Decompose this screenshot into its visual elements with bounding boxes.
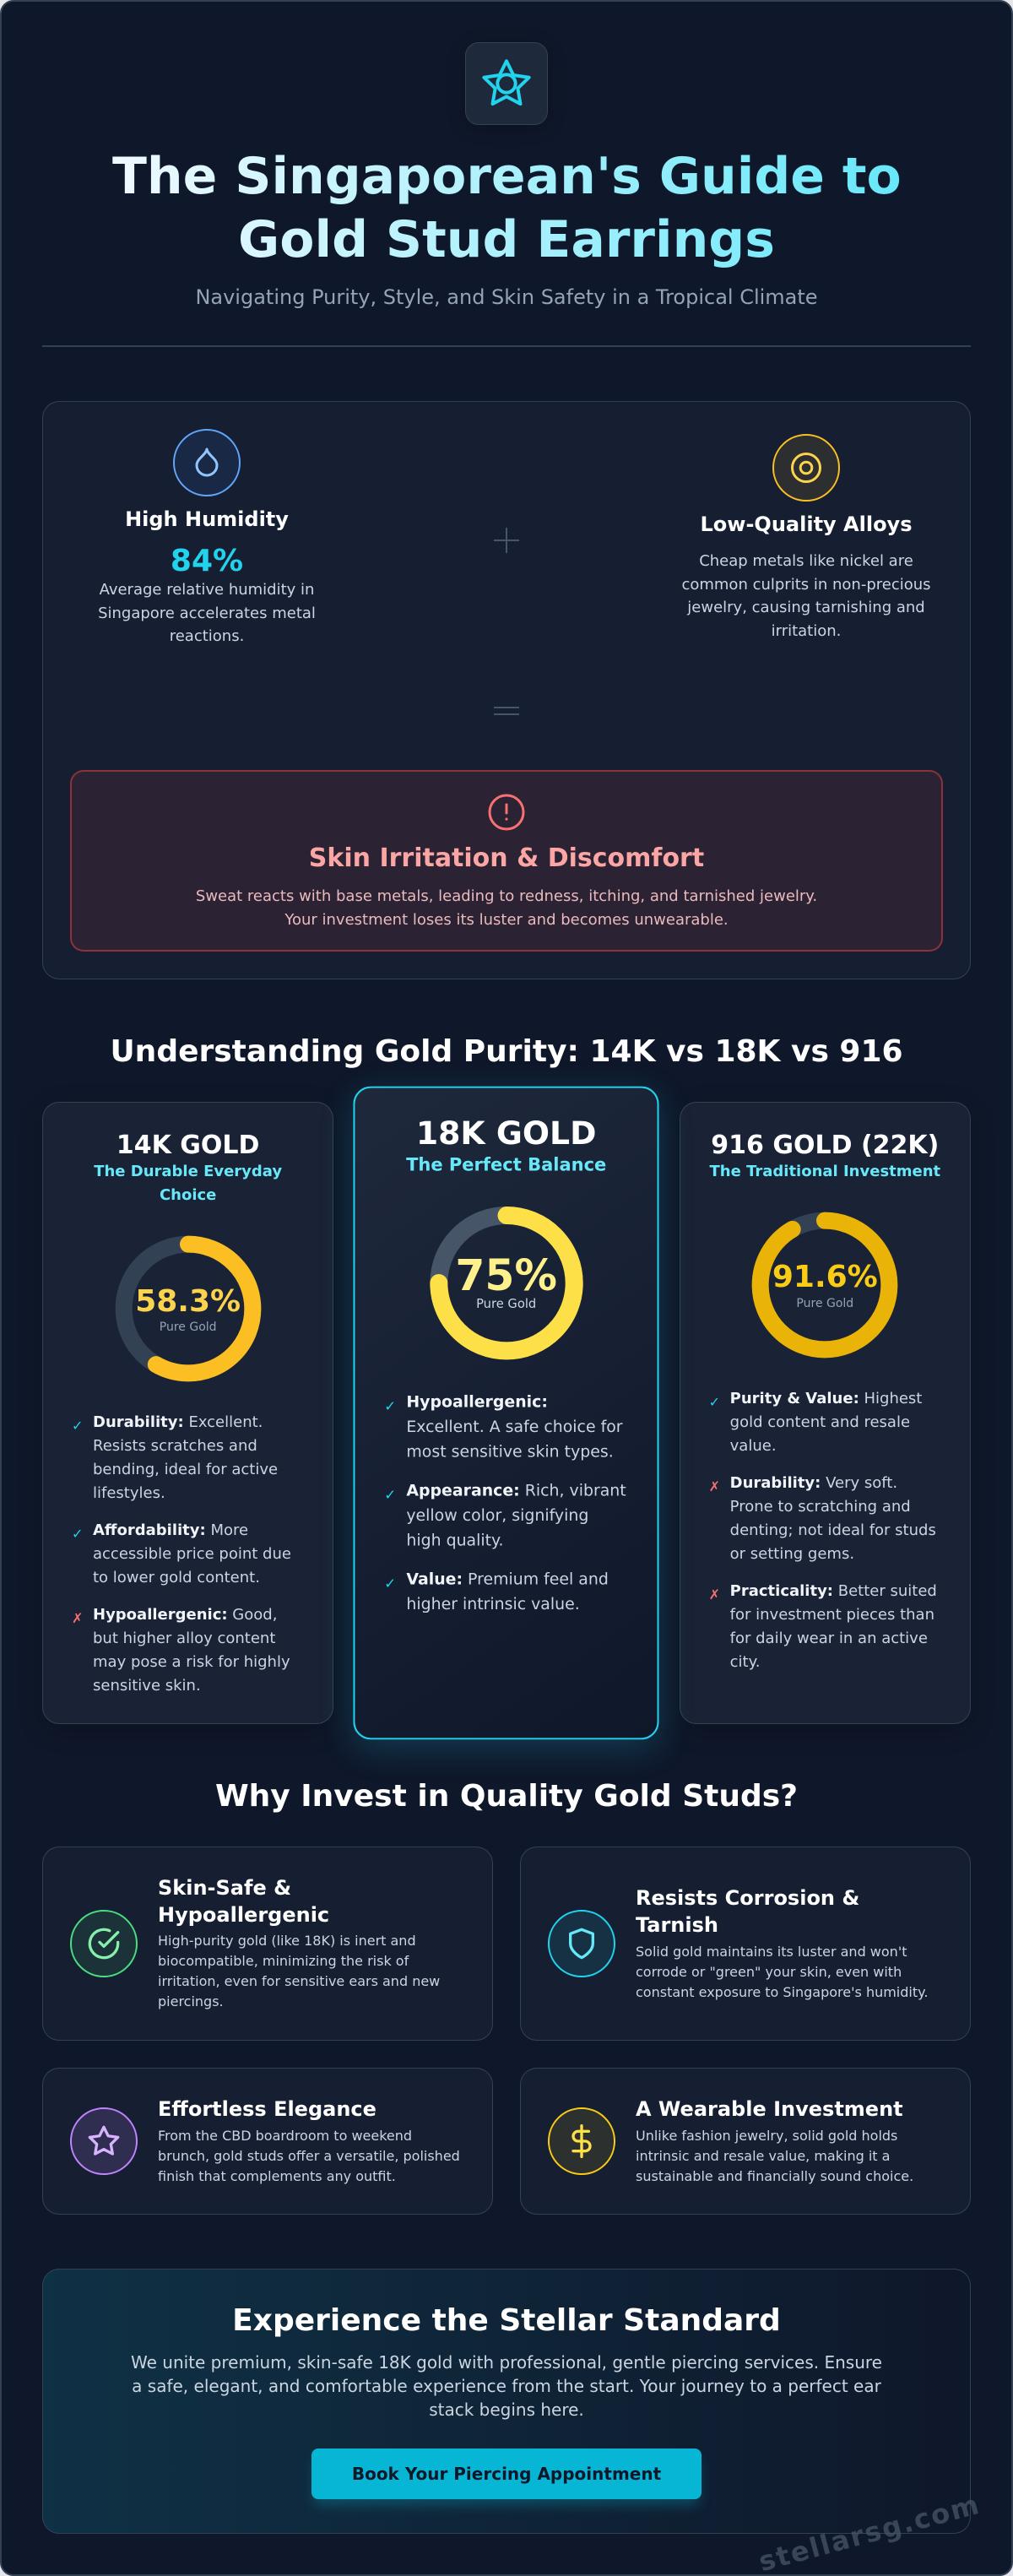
icon: alloy target [772,434,840,502]
text: investment description: Unlike fashion jewelry, solid gold holds [636,2128,897,2144]
list: 916 attributes: Purity & Value: Highest [730,1390,922,1407]
text: call to action description [131,2352,882,2420]
chart: donut 91.6%: Pure Gold [796,1297,853,1310]
heading: understanding gold purity: Understanding Gold Purity: 14K vs 18K vs 916 [110,1034,903,1069]
list: 14K attributes: lifestyles. [93,1484,165,1502]
chart: donut 91.6%: 91.6% [772,1260,878,1294]
list: 916 attributes: for investment pieces than [730,1606,934,1623]
heading: wearable investment: A Wearable Investment [636,2097,903,2121]
list: 916 attributes: value. [730,1437,777,1454]
list: 14K attributes [72,1413,291,1695]
heading: 18K gold: 18K GOLD [416,1115,597,1152]
icon: shield [548,1910,615,1977]
text: call to action description: We unite premium, skin-safe 18K gold with professional, gentle piercing services. Ensure [131,2352,882,2373]
chart: donut 58.3%: Pure Gold [160,1321,217,1334]
text: humidity description [98,581,316,645]
list: 14K attributes: accessible price point due [93,1545,291,1563]
subheading: traditional investment: The Traditional Investment [709,1163,940,1180]
list: 14K attributes: Hypoallergenic: Good, [93,1606,277,1624]
subheading: durable choice: Choice [160,1186,216,1204]
list: 18K attributes: high quality. [407,1532,504,1550]
chart: donut 58.3%: 58.3% [135,1284,241,1319]
title: The Singaporean's Guide to [112,147,902,206]
list: 14K attributes: Durability: Excellent. [93,1413,263,1431]
stat: 84%: 84% [171,544,243,578]
text: elegance description: brunch, gold studs offer a versatile, polished [158,2148,460,2164]
list: 14K attributes: to lower gold content. [93,1569,260,1586]
icon: equals [494,707,519,715]
text: skin-safe description: High-purity gold (like 18K) is inert and [158,1933,416,1949]
title [112,145,901,272]
button: book appointment: Book Your Piercing Appointment [352,2464,661,2484]
heading: why invest: Why Invest in Quality Gold Studs? [215,1779,798,1814]
text: skin-safe description: piercings. [158,1993,224,2009]
cause: high humidity [98,429,316,645]
icon: star emblem [465,42,548,125]
callout: skin irritation [70,770,943,952]
icon: star [70,2107,138,2175]
subheading: durable choice [94,1163,282,1204]
icon: dollar [548,2107,615,2175]
text: corrosion description: constant exposure to Singapore's humidity. [636,1984,928,2000]
text: skin-safe description: irritation, even for sensitive ears and new [158,1973,440,1989]
list: 18K attributes: Hypoallergenic: [407,1393,548,1412]
text: investment description [636,2128,913,2184]
list: 916 attributes: ✓ [709,1393,720,1410]
text: alloys description: jewelry, causing tarnishing and [687,599,925,616]
list: 18K attributes: Appearance: Rich, vibrant [407,1482,626,1500]
cause: low-quality alloys [681,434,931,640]
list: 18K attributes: ✓ [384,1486,397,1503]
list: 14K attributes: but higher alloy content [93,1630,275,1647]
text: skin-safe description: biocompatible, minimizing the risk of [158,1953,409,1969]
text: humidity description: Average relative humidity in [100,581,314,599]
list: 18K attributes: ✓ [384,1397,397,1414]
text: irritation description [196,887,817,929]
list: 18K attributes [384,1393,626,1613]
panel: 18K gold featured [354,1087,659,1739]
text: humidity description: Singapore accelerates metal [98,605,316,622]
text: corrosion description: Solid gold maintains its luster and won't [636,1944,907,1960]
chart: donut 58.3% [115,1236,262,1381]
list: 916 attributes: ✗ [709,1586,720,1603]
list: 18K attributes: most sensitive skin types. [407,1443,614,1462]
heading: 14K gold: 14K GOLD [116,1130,259,1160]
heading: high humidity: High Humidity [125,507,289,531]
heading: 916 gold: 916 GOLD (22K) [711,1130,939,1160]
panel: investment benefit [520,2068,971,2215]
list: 14K attributes: ✗ [72,1610,83,1626]
list: 14K attributes: Resists scratches and [93,1437,257,1455]
heading: resists corrosion: Resists Corrosion & [636,1886,859,1910]
list: 14K attributes: Affordability: More [93,1521,248,1539]
list: 916 attributes: for daily wear in an active [730,1630,928,1646]
list: 916 attributes: denting; not ideal for studs [730,1521,936,1538]
list: 14K attributes: sensitive skin. [93,1677,201,1695]
heading: skin-safe: Skin-Safe & [158,1876,291,1900]
heading: skin-safe [158,1876,329,1927]
heading: skin-safe: Hypoallergenic [158,1903,329,1927]
list: 916 attributes: Durability: Very soft. [730,1474,897,1491]
text: irritation description: Sweat reacts with base metals, leading to redness, itching, and tarnished jewelry. [196,887,817,905]
list: 916 attributes: Practicality: Better suited [730,1582,937,1599]
list: 18K attributes: Value: Premium feel and [407,1570,609,1589]
button: book appointment [311,2449,702,2499]
chart: donut 75%: Pure Gold [476,1297,537,1311]
panel: 916 gold [680,1102,971,1724]
chart: donut 75%: 75% [456,1251,557,1301]
text: skin-safe description [158,1933,440,2009]
list: 18K attributes: ✓ [384,1575,397,1592]
panel: skin-safe benefit [42,1847,493,2041]
list: 18K attributes: Excellent. A safe choice for [407,1418,623,1436]
text: elegance description [158,2128,460,2184]
panel: elegance benefit [42,2068,493,2215]
panel: corrosion benefit [520,1847,971,2041]
heading: skin irritation: Skin Irritation & Discomfort [309,843,704,873]
text: call to action description: a safe, elegant, and comfortable experience from the start. Your journey to a perfect ear [132,2376,881,2396]
text: humidity description: reactions. [170,627,244,645]
icon: water drop [173,429,241,496]
list: 14K attributes: ✓ [72,1526,83,1542]
text: alloys description: irritation. [772,622,841,640]
text: corrosion description [636,1944,928,2000]
heading: resists corrosion [636,1886,859,1937]
text: corrosion description: corrode or "green" your skin, even with [636,1964,902,1980]
text: alloys description [681,552,931,640]
list: 916 attributes: gold content and resale [730,1413,910,1430]
text: alloys description: Cheap metals like nickel are [699,552,913,570]
subheading: perfect balance: The Perfect Balance [406,1153,607,1175]
list: 14K attributes: may pose a risk for highly [93,1653,290,1671]
text: irritation description: Your investment loses its luster and becomes unwearable. [284,911,729,929]
list: 916 attributes: Prone to scratching and [730,1498,911,1515]
subtitle: Navigating Purity, Style, and Skin Safety in a Tropical Climate [195,285,818,309]
chart: donut 91.6% [751,1212,898,1358]
list: 916 attributes [709,1390,937,1670]
text: elegance description: finish that complements any outfit. [158,2168,396,2184]
list: 916 attributes: or setting gems. [730,1545,854,1562]
heading: low-quality alloys: Low-Quality Alloys [701,512,912,536]
list: 14K attributes: ✓ [72,1418,83,1434]
title: Gold Stud Earrings [238,210,775,269]
heading: resists corrosion: Tarnish [636,1913,718,1937]
text: call to action description: stack begins here. [429,2400,584,2420]
text: alloys description: common culprits in non-precious [681,576,931,594]
heading: effortless elegance: Effortless Elegance [158,2097,376,2121]
list: 14K attributes: bending, ideal for active [93,1461,278,1478]
text: investment description: sustainable and financially sound choice. [636,2168,913,2184]
text: elegance description: From the CBD boardroom to weekend [158,2128,412,2144]
heading: stellar standard: Experience the Stellar Standard [232,2303,781,2338]
list: 916 attributes: city. [730,1653,760,1670]
list: 916 attributes: ✗ [709,1478,720,1494]
watermark: stellarsg.com [756,2488,983,2576]
list: 18K attributes: higher intrinsic value. [407,1595,580,1613]
panel: call to action [42,2269,971,2534]
text: investment description: intrinsic and resale value, making it a [636,2148,890,2164]
subheading: durable choice: The Durable Everyday [94,1163,282,1180]
icon: alert [488,794,525,831]
panel: causes of skin irritation [42,401,971,979]
panel: 14K gold [42,1102,333,1724]
icon: check circle [70,1910,138,1977]
chart: donut 75% [430,1207,583,1359]
list: 18K attributes: yellow color, signifying [407,1506,589,1525]
icon: plus [494,528,519,553]
